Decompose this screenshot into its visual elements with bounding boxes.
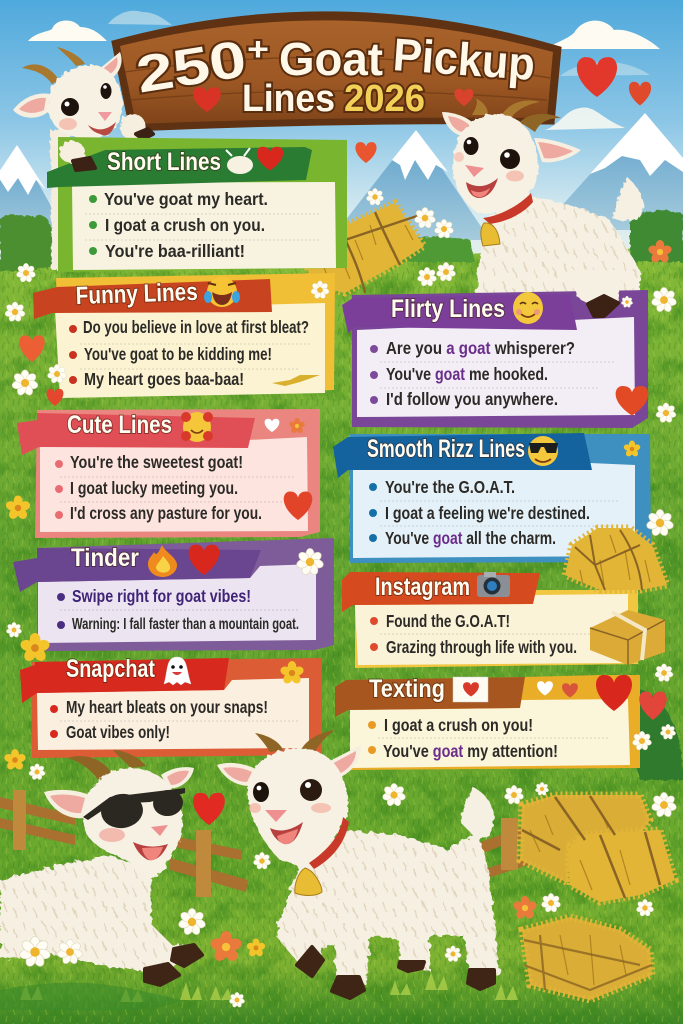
clouds [28,11,660,130]
title text: 250 [132,30,250,105]
text lines [368,715,610,761]
icon: smiling emoji [513,292,543,324]
grass tufts [20,972,518,1002]
panel: funny lines [33,273,335,398]
text lines [370,611,590,657]
ribbon: Cute Lines [67,411,172,439]
icon: heart [189,545,219,575]
text lines: You've goat all the charm. [385,528,556,548]
ribbon [333,433,592,478]
title text: Goat [279,33,383,85]
ribbon: Flirty Lines [391,295,505,323]
icon: flame [148,545,177,577]
panel: snapchat [20,655,322,758]
icon: goat face and heart [226,147,283,174]
text lines: You've goat to be kidding me! [84,344,272,364]
hooves [297,947,494,998]
ribbon: Short Lines [107,148,221,176]
title text: 2026 [344,78,425,120]
text lines: Found the G.O.A.T! [386,611,510,631]
goat top-left front paw [59,141,95,170]
mountains [0,113,683,240]
icon: sunglasses emoji [528,436,558,466]
text lines: My heart bleats on your snaps! [66,697,268,717]
panel: cute lines [17,409,320,538]
hay bales bottom [520,795,675,1000]
icon: sign heart right [454,89,474,106]
ribbon [47,147,312,188]
hay bale right [565,528,667,590]
text lines: Warning: I fall faster than a mountain goat. [72,616,299,633]
ribbon: Snapchat [66,655,156,683]
ribbon [335,675,525,717]
ribbon: Smooth Rizz Lines [367,435,525,463]
text lines: Are you a goat whisperer? [386,338,575,358]
ribbon [342,294,577,333]
grass texture [0,255,683,1024]
title text: Pickup [391,28,537,90]
text lines: You're the sweetest goat! [70,452,243,472]
icon: message [453,677,488,702]
hooves [145,945,202,985]
text lines: I'd follow you anywhere. [386,389,558,409]
paws [120,114,153,140]
goat bottom-left with sunglasses [0,750,202,985]
title text: Lines [242,78,335,120]
icon: camera [477,572,510,597]
text lines: You're the G.O.A.T. [385,477,515,497]
ribbon: Instagram [375,573,470,601]
ribbon [342,572,540,612]
panel: short lines [47,137,347,272]
small icons [265,418,305,434]
text lines: Swipe right for goat vibes! [72,586,251,606]
goat top-left head [13,47,153,140]
panel: texting [335,675,640,770]
text lines [69,317,320,389]
icon: laughing emoji [204,277,240,307]
ribbon [13,544,261,592]
collar and bell [481,193,533,246]
grass blades [0,258,683,1024]
icon: heart [616,386,648,416]
text lines: Grazing through life with you. [386,637,577,657]
panel: flirty lines [342,290,648,428]
dark grass shadow [0,983,180,1011]
collar and bell [295,817,349,896]
text lines: You've goat me hooked. [386,364,548,384]
text lines [50,697,300,742]
meadow ground [0,249,683,1024]
text lines: You've goat my attention! [383,741,558,761]
small flower icon [623,440,641,458]
icon: hearts emoji [181,412,213,442]
hay roll top [305,203,424,293]
goat bottom-center [217,730,500,998]
panel: instagram [342,572,638,668]
title text [132,28,537,120]
ribbon [17,411,255,455]
hay parcel [590,610,665,665]
flowers [3,188,677,1008]
bushes [0,210,683,780]
ribbon [33,278,272,319]
fence left [0,790,248,897]
text lines: I goat lucky meeting you. [70,478,238,498]
text lines [369,477,620,548]
goat hoof over flirty panel [572,270,620,316]
ribbon: Tinder [71,544,139,572]
icon: heart [284,492,312,520]
text lines: I goat a crush on you! [384,715,533,735]
background: sky [0,0,683,270]
ribbon [20,655,229,703]
sunglasses [83,788,185,831]
goat top-right [442,98,644,295]
text lines: I goat a feeling we're destined. [385,503,590,523]
text lines: Goat vibes only! [66,722,170,742]
small hearts [537,681,578,698]
goat top-left body [50,130,70,270]
text lines [57,586,300,633]
wooden title sign [113,13,560,130]
icon: ghost [164,657,191,685]
text lines: You've goat my heart. [104,189,268,209]
ribbon: Texting [369,675,445,703]
text lines: Do you believe in love at first bleat? [83,317,309,337]
text lines [370,338,615,409]
fence right [478,818,530,878]
floating hearts [19,57,667,825]
panel: tinder [13,538,334,651]
text lines [85,189,320,261]
icon: sign heart [193,87,221,112]
text lines: You're baa-rilliant! [105,241,245,261]
text lines: My heart goes baa-baa! [84,369,244,389]
text lines: I'd cross any pasture for you. [70,503,262,523]
ribbon: Funny Lines [75,278,198,310]
title text: + [247,31,269,67]
panel: smooth rizz lines [333,433,651,563]
text lines: I goat a crush on you. [105,215,265,235]
text lines [55,452,295,523]
